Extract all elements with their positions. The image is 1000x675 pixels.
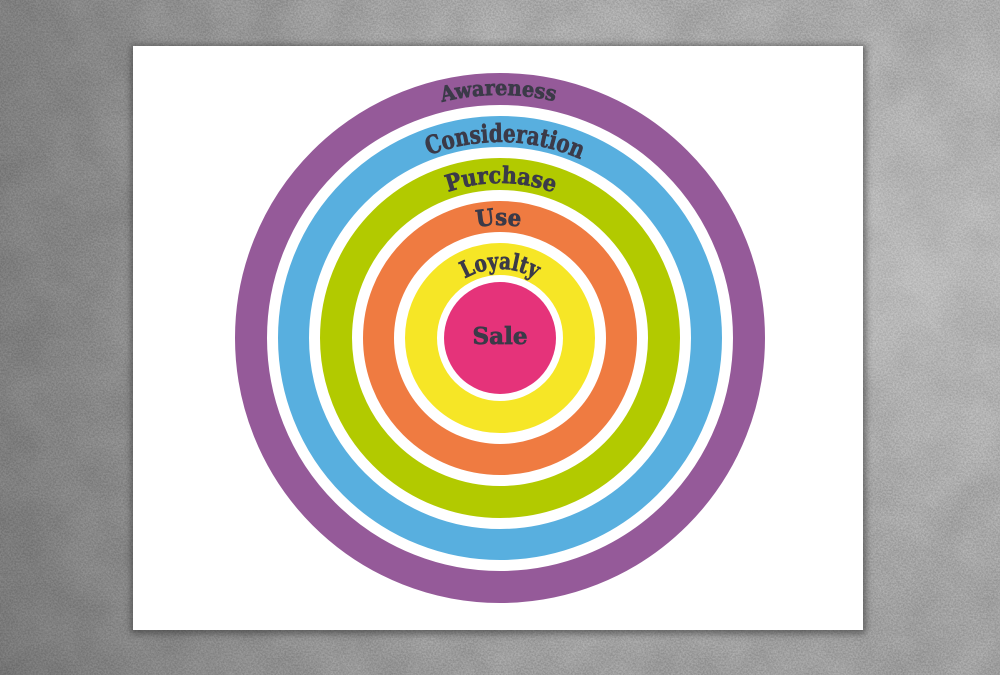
centre: Sale: Sale	[472, 323, 528, 350]
ring: Purchase	[320, 158, 680, 518]
ring: Awareness: Awareness	[441, 84, 556, 102]
ring diagram	[235, 73, 765, 603]
ring: Loyalty: Loyalty	[458, 252, 542, 280]
ring: Consideration	[278, 116, 722, 560]
ring: Consideration: Consideration	[425, 122, 583, 160]
ring: Use	[363, 201, 637, 475]
ring: Loyalty	[405, 243, 595, 433]
paper shadow	[131, 45, 866, 634]
ring: Purchase: Purchase	[444, 165, 556, 192]
centre: Sale	[444, 282, 556, 394]
ring: Use: Use	[475, 208, 520, 227]
white paper panel	[133, 46, 863, 630]
